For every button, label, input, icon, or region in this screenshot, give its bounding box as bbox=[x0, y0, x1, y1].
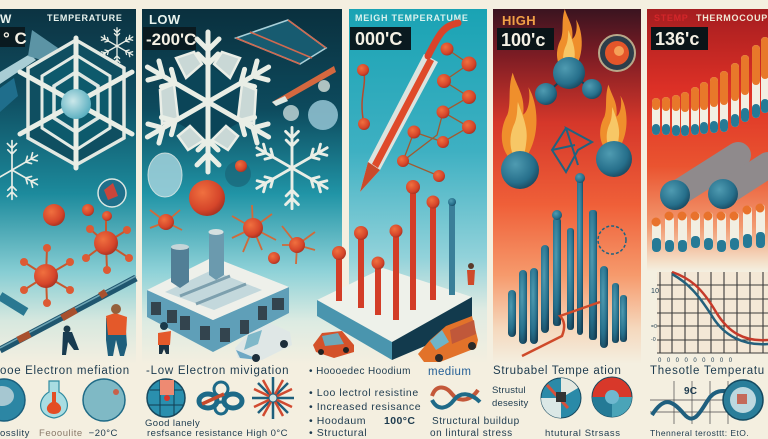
bullet list: panel three: • Loo lectrol resistine bbox=[309, 387, 419, 399]
icon: frosted circle bbox=[83, 379, 125, 421]
badge: 136C: 136'c bbox=[655, 29, 699, 49]
capsule bars bbox=[652, 37, 768, 136]
icon row: panel two bbox=[145, 377, 294, 439]
caption: panel four: Strubabel Tempe ation bbox=[493, 365, 622, 377]
rolling tubes bbox=[660, 155, 768, 210]
text: thermal caption: Thenneral terosttt: EtO. bbox=[650, 428, 749, 438]
text: structural density: Strustul bbox=[492, 385, 526, 396]
chart axis labels: -0 bbox=[651, 337, 656, 343]
blue atom right bbox=[596, 141, 632, 177]
panel: medium temperature bbox=[313, 9, 487, 364]
panel: very low temperature bbox=[0, 9, 136, 364]
icon: starburst bbox=[252, 377, 294, 419]
heading: thermocouple: STEMP bbox=[654, 13, 689, 23]
chart axis labels: 10 bbox=[651, 288, 659, 295]
heading: low temperature: TEMPERATURE bbox=[47, 13, 123, 23]
captions under panels bbox=[0, 365, 765, 378]
cracked disc bbox=[598, 226, 626, 254]
chart axis labels: 000000000 bbox=[658, 358, 738, 364]
icon: small gauge bbox=[98, 179, 126, 207]
snowflake lower left bbox=[0, 141, 40, 199]
panel: high temperature bbox=[493, 9, 641, 364]
orange van bbox=[418, 316, 478, 362]
badge: 100C: 100'c bbox=[501, 30, 545, 50]
icon: ice circle bbox=[0, 379, 25, 421]
icon: thermometer pen bbox=[360, 23, 458, 192]
icon: linked loops bbox=[199, 382, 242, 414]
heading: LOW: LOW bbox=[149, 12, 181, 27]
bullet list: panel three: • Increased resisance bbox=[309, 401, 421, 413]
icon: pie one bbox=[541, 378, 581, 418]
red sphere bbox=[189, 180, 225, 216]
badge: -200C: -200'C bbox=[146, 30, 196, 49]
snow-covered building bbox=[147, 229, 289, 352]
red car bbox=[313, 331, 354, 358]
flames bbox=[502, 9, 627, 165]
electron molecules bbox=[20, 204, 133, 307]
red arrow bbox=[522, 302, 600, 356]
small curve chart: 9C bbox=[684, 386, 697, 397]
badge: 136C bbox=[651, 27, 708, 50]
heading: medium temperature: MEIGH TEMPERATUME bbox=[355, 13, 469, 23]
badge: 000C bbox=[350, 27, 411, 50]
text: structural build up bbox=[430, 416, 520, 439]
text: structural density bbox=[492, 385, 529, 409]
chart axis labels: =0 bbox=[651, 324, 657, 330]
text: structural build up: on lintural stress bbox=[430, 428, 513, 439]
pipeline bbox=[0, 276, 136, 350]
text: structural stress: htutural Strsass bbox=[545, 428, 621, 439]
small pin ball bbox=[225, 160, 251, 187]
icon: thermometer bulb bbox=[41, 381, 67, 418]
badge: temperature value: ° C bbox=[3, 29, 27, 48]
caption: panel two: -Low Electron mivigation bbox=[146, 365, 289, 377]
heading: low temperature bbox=[0, 12, 123, 26]
plinth bbox=[317, 268, 472, 360]
central molecule bbox=[535, 57, 602, 105]
icon: pie two bbox=[592, 377, 632, 417]
text: structural build up: Structural buildup bbox=[432, 416, 520, 427]
text: bottom labels: osslity Feooulite −20°C bbox=[0, 428, 118, 439]
icon: gauge disc bbox=[723, 380, 763, 420]
text: structural density: desesity bbox=[492, 398, 529, 409]
icon row: panel one bbox=[0, 379, 125, 439]
caption: panel five: Thesotle Temperatu bbox=[650, 365, 765, 377]
large hexagonal snowflake bbox=[20, 38, 132, 168]
large snowflake bbox=[142, 32, 274, 172]
caption: panel three: medium bbox=[428, 366, 471, 378]
atom disc bbox=[599, 35, 635, 71]
bullet list: panel three: • Structural bbox=[309, 427, 367, 439]
icon: thermometer probe bbox=[272, 66, 336, 106]
small worker bbox=[467, 263, 475, 285]
caption: panel three bbox=[309, 366, 471, 378]
blue columns bbox=[508, 173, 627, 348]
icon: chain links bbox=[432, 388, 480, 408]
icon: probe at left bbox=[0, 30, 58, 112]
star molecules bbox=[150, 205, 315, 264]
heading: thermocouple bbox=[654, 13, 768, 23]
ice sphere bbox=[148, 153, 182, 197]
heading: HIGH: HIGH bbox=[502, 13, 536, 28]
icon: grid circle bbox=[147, 379, 185, 417]
person bbox=[158, 322, 171, 354]
heading: low temperature: W bbox=[0, 12, 12, 26]
bullet list: panel three: • Hoodaum bbox=[309, 415, 366, 427]
people in snow bbox=[62, 304, 127, 356]
icon: circuit sketch bbox=[236, 20, 326, 64]
caption: panel three: • Hoooedec Hoodium bbox=[309, 366, 411, 377]
small molecule upper left bbox=[357, 64, 370, 130]
second snowflake bbox=[254, 127, 330, 209]
blue atom left bbox=[501, 151, 539, 189]
line chart bbox=[651, 272, 768, 364]
car bbox=[235, 323, 292, 362]
bullet list: panel three bbox=[309, 387, 421, 439]
bullet list: panel three: 100°C bbox=[384, 415, 415, 427]
small snowflake top right bbox=[100, 28, 134, 64]
caption: panel one: ooe Electron mefiation bbox=[0, 365, 130, 377]
red and blue columns bbox=[332, 180, 456, 320]
panel: low -200C bbox=[142, 9, 342, 364]
ice crystal cluster bbox=[283, 80, 338, 130]
text: bottom labels: resfsance resistance High 0°C bbox=[147, 428, 288, 439]
molecule chain bbox=[397, 42, 476, 182]
text: bottom labels: Good lanely bbox=[145, 418, 200, 429]
structure wire bbox=[552, 128, 592, 172]
lower capsule row bbox=[652, 204, 765, 252]
small curve chart bbox=[650, 381, 738, 424]
icon row: panel three and four bbox=[430, 377, 632, 439]
panel: thermocouple bbox=[647, 9, 768, 364]
text: bottom labels bbox=[145, 418, 288, 439]
heading: thermocouple: THERMOCOUP bbox=[696, 13, 768, 23]
badge: 000C: 000'C bbox=[355, 29, 402, 49]
chart axis labels bbox=[651, 288, 738, 364]
